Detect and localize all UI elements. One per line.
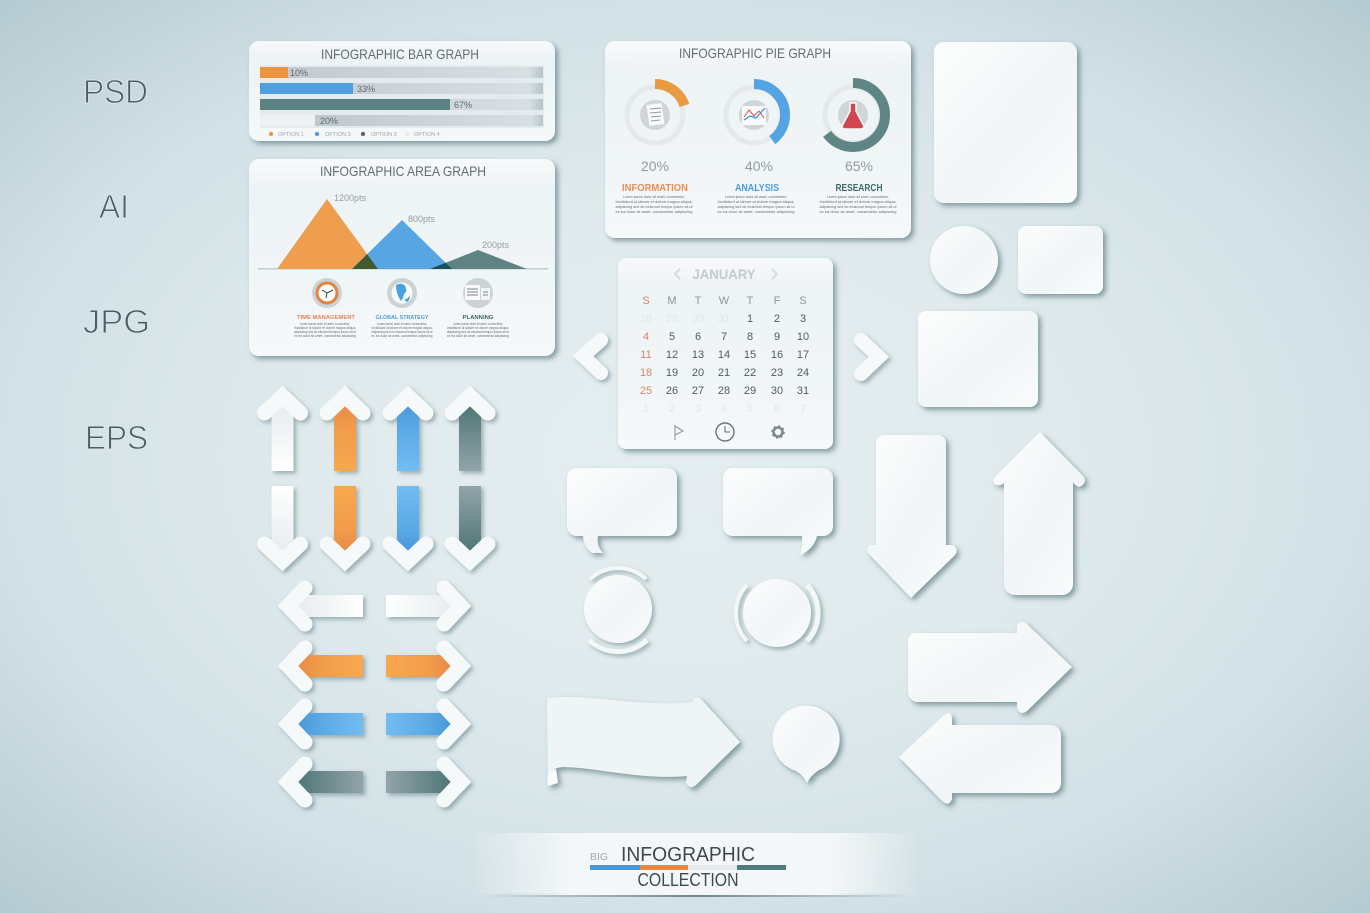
arrow down: white xyxy=(264,486,300,561)
calendar grid: T xyxy=(747,295,754,307)
speech bubble: right tail xyxy=(723,468,833,555)
icon: planning xyxy=(463,278,493,308)
panel: calendar xyxy=(618,258,833,449)
donut: research 65%: RESEARCH xyxy=(836,183,882,194)
bar: option 1 10%: 10% xyxy=(290,68,308,78)
donut: analysis 40%: Incididunt ut labore et dolore magna aliqua, xyxy=(718,199,794,204)
bar: option 1 10% xyxy=(260,67,543,78)
bottom banner xyxy=(470,833,920,897)
area chart: 800pts xyxy=(408,214,436,224)
icon: gear xyxy=(772,426,784,438)
bar: option 3 67% xyxy=(260,99,543,110)
icon: flag xyxy=(675,426,683,440)
column: planning: PLANNING xyxy=(462,315,494,321)
calendar grid: 3 xyxy=(695,403,701,415)
bar: option 2 33% xyxy=(260,83,543,94)
calendar grid: 29 xyxy=(666,313,678,325)
calendar grid: 5 xyxy=(669,331,675,343)
column: planning: Incididunt ut labore et dolore magna aliqua, xyxy=(447,325,509,330)
calendar grid: S xyxy=(642,295,650,307)
arrow up: white xyxy=(264,396,300,471)
calendar grid: 21 xyxy=(718,367,730,379)
format label: EPS: EPS xyxy=(85,419,148,456)
banner colour rule xyxy=(590,865,786,870)
bar: option 4 20%: 20% xyxy=(320,116,338,126)
large arrow: right xyxy=(908,622,1072,713)
arrow right: white xyxy=(386,588,461,624)
format label: JPG: JPG xyxy=(83,303,150,340)
icon: clock xyxy=(716,423,734,441)
pie graph heading: INFOGRAPHIC PIE GRAPH xyxy=(679,45,831,61)
icon: globe xyxy=(387,278,417,308)
calendar grid: T xyxy=(695,295,702,307)
bar graph heading: INFOGRAPHIC BAR GRAPH xyxy=(321,46,479,62)
arrow right: teal xyxy=(386,764,461,800)
donut: information 20%: adipiscing sed do eiusmod tempor ipsum sit ut xyxy=(616,204,693,209)
calendar grid: 1 xyxy=(643,403,649,415)
arrow up: blue xyxy=(390,396,426,471)
column: global strategy: Lorem ipsum dolor sit amet, consectetur, xyxy=(377,321,427,326)
calendar month header xyxy=(675,266,777,282)
bar: option 4 20% xyxy=(260,115,543,126)
blank circle xyxy=(930,226,998,294)
calendar month header: JANUARY xyxy=(692,266,756,282)
column: planning: adipiscing sed do eiusmod tempor ipsum sit ut xyxy=(447,329,510,334)
large arrow: up xyxy=(993,432,1085,595)
arrow down: blue xyxy=(390,486,426,561)
area graph heading: INFOGRAPHIC AREA GRAPH xyxy=(320,163,486,179)
calendar grid: 25 xyxy=(640,385,652,397)
area chart xyxy=(258,193,548,270)
calendar grid: 2 xyxy=(774,313,780,325)
bar: option 2 33%: 33% xyxy=(357,84,375,94)
calendar grid: 2 xyxy=(669,403,675,415)
calendar grid xyxy=(640,295,809,415)
icon: document xyxy=(647,103,664,126)
donut: information 20%: Lorem ipsum dolor sit amet, consectetur, xyxy=(623,194,685,199)
panel: pie graph xyxy=(605,41,911,238)
donut: information 20%: Incididunt ut labore et dolore magna aliqua, xyxy=(616,199,692,204)
panel: area graph xyxy=(249,159,555,356)
banner subtitle: COLLECTION xyxy=(638,870,738,890)
calendar grid: 7 xyxy=(721,331,727,343)
bar graph legend: OPTION 3 xyxy=(371,132,397,138)
calendar grid: 6 xyxy=(695,331,701,343)
arrow down: teal xyxy=(452,486,488,561)
round speech bubble xyxy=(773,706,840,783)
column: planning xyxy=(447,315,510,338)
format label: AI: AI xyxy=(99,188,129,225)
arrow up: orange xyxy=(327,396,363,471)
donut: analysis 40% xyxy=(718,84,795,214)
icon: clock xyxy=(312,278,342,308)
column: time management: adipiscing sed do eiusmod tempor ipsum sit ut xyxy=(294,329,357,334)
donut: research 65%: adipiscing sed do eiusmod tempor ipsum sit ut xyxy=(820,204,897,209)
arrow left: teal xyxy=(288,764,363,800)
donut: information 20%: 20% xyxy=(641,158,669,174)
calendar grid: 5 xyxy=(747,403,753,415)
column: planning: Lorem ipsum dolor sit amet, consectetur, xyxy=(453,321,503,326)
calendar grid: 4 xyxy=(721,403,727,415)
bar: option 3 67%: 67% xyxy=(454,100,472,110)
arrow left: orange xyxy=(288,648,363,684)
ringed circle: side arcs xyxy=(736,579,818,647)
large arrow: left xyxy=(899,713,1061,804)
calendar grid: 30 xyxy=(692,313,704,325)
arrow left: blue xyxy=(288,706,363,742)
blank card: medium xyxy=(918,311,1038,407)
column: global strategy: adipiscing sed do eiusmod tempor ipsum sit ut xyxy=(372,329,433,334)
calendar grid: 19 xyxy=(666,367,678,379)
calendar grid: S xyxy=(799,295,807,307)
calendar grid: 23 xyxy=(771,367,783,379)
calendar grid: 13 xyxy=(692,349,704,361)
calendar grid: 11 xyxy=(640,349,652,361)
column: global strategy xyxy=(372,315,433,338)
area chart: 200pts xyxy=(482,240,510,250)
column: time management xyxy=(294,315,357,338)
column: time management: TIME MANAGEMENT xyxy=(297,315,355,321)
calendar grid: 20 xyxy=(692,367,704,379)
donut: research 65%: Lorem ipsum dolor sit amet, consectetur, xyxy=(827,194,889,199)
calendar grid: 27 xyxy=(692,385,704,397)
arrow set: vertical up xyxy=(264,396,488,471)
arrow down: orange xyxy=(327,486,363,561)
calendar grid: 18 xyxy=(640,367,652,379)
calendar grid: W xyxy=(719,295,730,307)
blank card: large square xyxy=(934,42,1077,203)
calendar grid: M xyxy=(667,295,677,307)
arrow right: orange xyxy=(386,648,461,684)
chevron: previous xyxy=(583,340,601,373)
calendar grid: 7 xyxy=(800,403,806,415)
donut: analysis 40%: ex ea dolor sit amet, consectetur adipiscing xyxy=(718,209,794,214)
column: time management: Incididunt ut labore et dolore magna aliqua, xyxy=(294,325,356,330)
donut: information 20%: INFORMATION xyxy=(622,183,688,194)
ringed circle: top and bottom arcs xyxy=(584,568,652,652)
column: planning: ex ea dolor sit amet, consectetur adipiscing xyxy=(447,333,509,338)
calendar grid: 14 xyxy=(718,349,730,361)
banner title: INFOGRAPHIC xyxy=(621,844,755,866)
donut: analysis 40%: ANALYSIS xyxy=(735,183,779,194)
icon: flask xyxy=(842,103,864,129)
column: global strategy: GLOBAL STRATEGY xyxy=(376,315,429,321)
calendar grid: 8 xyxy=(747,331,753,343)
icon: line chart xyxy=(742,106,766,125)
calendar grid: 26 xyxy=(666,385,678,397)
column: global strategy: ex ea dolor sit amet, consectetur adipiscing xyxy=(372,333,432,338)
area chart: 1200pts xyxy=(334,193,367,203)
calendar grid: 28 xyxy=(718,385,730,397)
calendar grid: 30 xyxy=(771,385,783,397)
bar graph legend: OPTION 4 xyxy=(414,132,440,138)
donut: research 65%: Incididunt ut labore et dolore magna aliqua, xyxy=(820,199,896,204)
ribbon arrow xyxy=(547,697,740,787)
arrow set: horizontal left xyxy=(288,588,363,800)
calendar grid: 10 xyxy=(797,331,809,343)
arrow up: teal xyxy=(452,396,488,471)
arrow left: white xyxy=(288,588,363,624)
banner text: BIG: BIG xyxy=(590,852,608,863)
format label: PSD: PSD xyxy=(83,73,148,110)
donut: research 65%: ex ea dolor sit amet, consectetur adipiscing xyxy=(820,209,896,214)
calendar grid: 16 xyxy=(771,349,783,361)
arrow right: blue xyxy=(386,706,461,742)
calendar grid: 6 xyxy=(774,403,780,415)
donut: analysis 40%: Lorem ipsum dolor sit amet, consectetur, xyxy=(725,194,787,199)
calendar grid: 3 xyxy=(800,313,806,325)
calendar grid: 31 xyxy=(797,385,809,397)
calendar grid: 17 xyxy=(797,349,809,361)
calendar grid: 22 xyxy=(744,367,756,379)
donut: research 65%: 65% xyxy=(845,158,873,174)
bar graph legend: OPTION 1 xyxy=(278,132,304,138)
donut: analysis 40%: adipiscing sed do eiusmod tempor ipsum sit ut xyxy=(718,204,795,209)
large arrow: down xyxy=(867,435,957,598)
panel: bar graph xyxy=(249,41,555,141)
bar graph legend: OPTION 3 xyxy=(325,132,351,138)
calendar grid: 29 xyxy=(744,385,756,397)
donut: information 20% xyxy=(616,84,693,214)
calendar grid: 31 xyxy=(718,313,730,325)
column: global strategy: Incididunt ut labore et dolore magna aliqua, xyxy=(372,325,432,330)
calendar grid: 9 xyxy=(774,331,780,343)
speech bubble: left tail xyxy=(567,468,677,553)
donut: research 65% xyxy=(820,83,897,214)
calendar grid: F xyxy=(774,295,781,307)
column: time management: Lorem ipsum dolor sit amet, consectetur, xyxy=(300,321,350,326)
arrow set: vertical down xyxy=(264,486,488,561)
calendar grid: 4 xyxy=(643,331,649,343)
column: time management: ex ea dolor sit amet, consectetur adipiscing xyxy=(294,333,356,338)
donut: analysis 40%: 40% xyxy=(745,158,773,174)
calendar grid: 1 xyxy=(747,313,753,325)
calendar grid: 28 xyxy=(640,313,652,325)
arrow set: horizontal right xyxy=(386,588,461,800)
calendar grid: 15 xyxy=(744,349,756,361)
bar graph legend xyxy=(269,132,440,138)
calendar grid: 24 xyxy=(797,367,809,379)
blank card: small xyxy=(1018,226,1103,294)
chevron: next xyxy=(861,340,879,374)
calendar grid: 12 xyxy=(666,349,678,361)
donut: information 20%: ex ea dolor sit amet, consectetur adipiscing xyxy=(616,209,692,214)
